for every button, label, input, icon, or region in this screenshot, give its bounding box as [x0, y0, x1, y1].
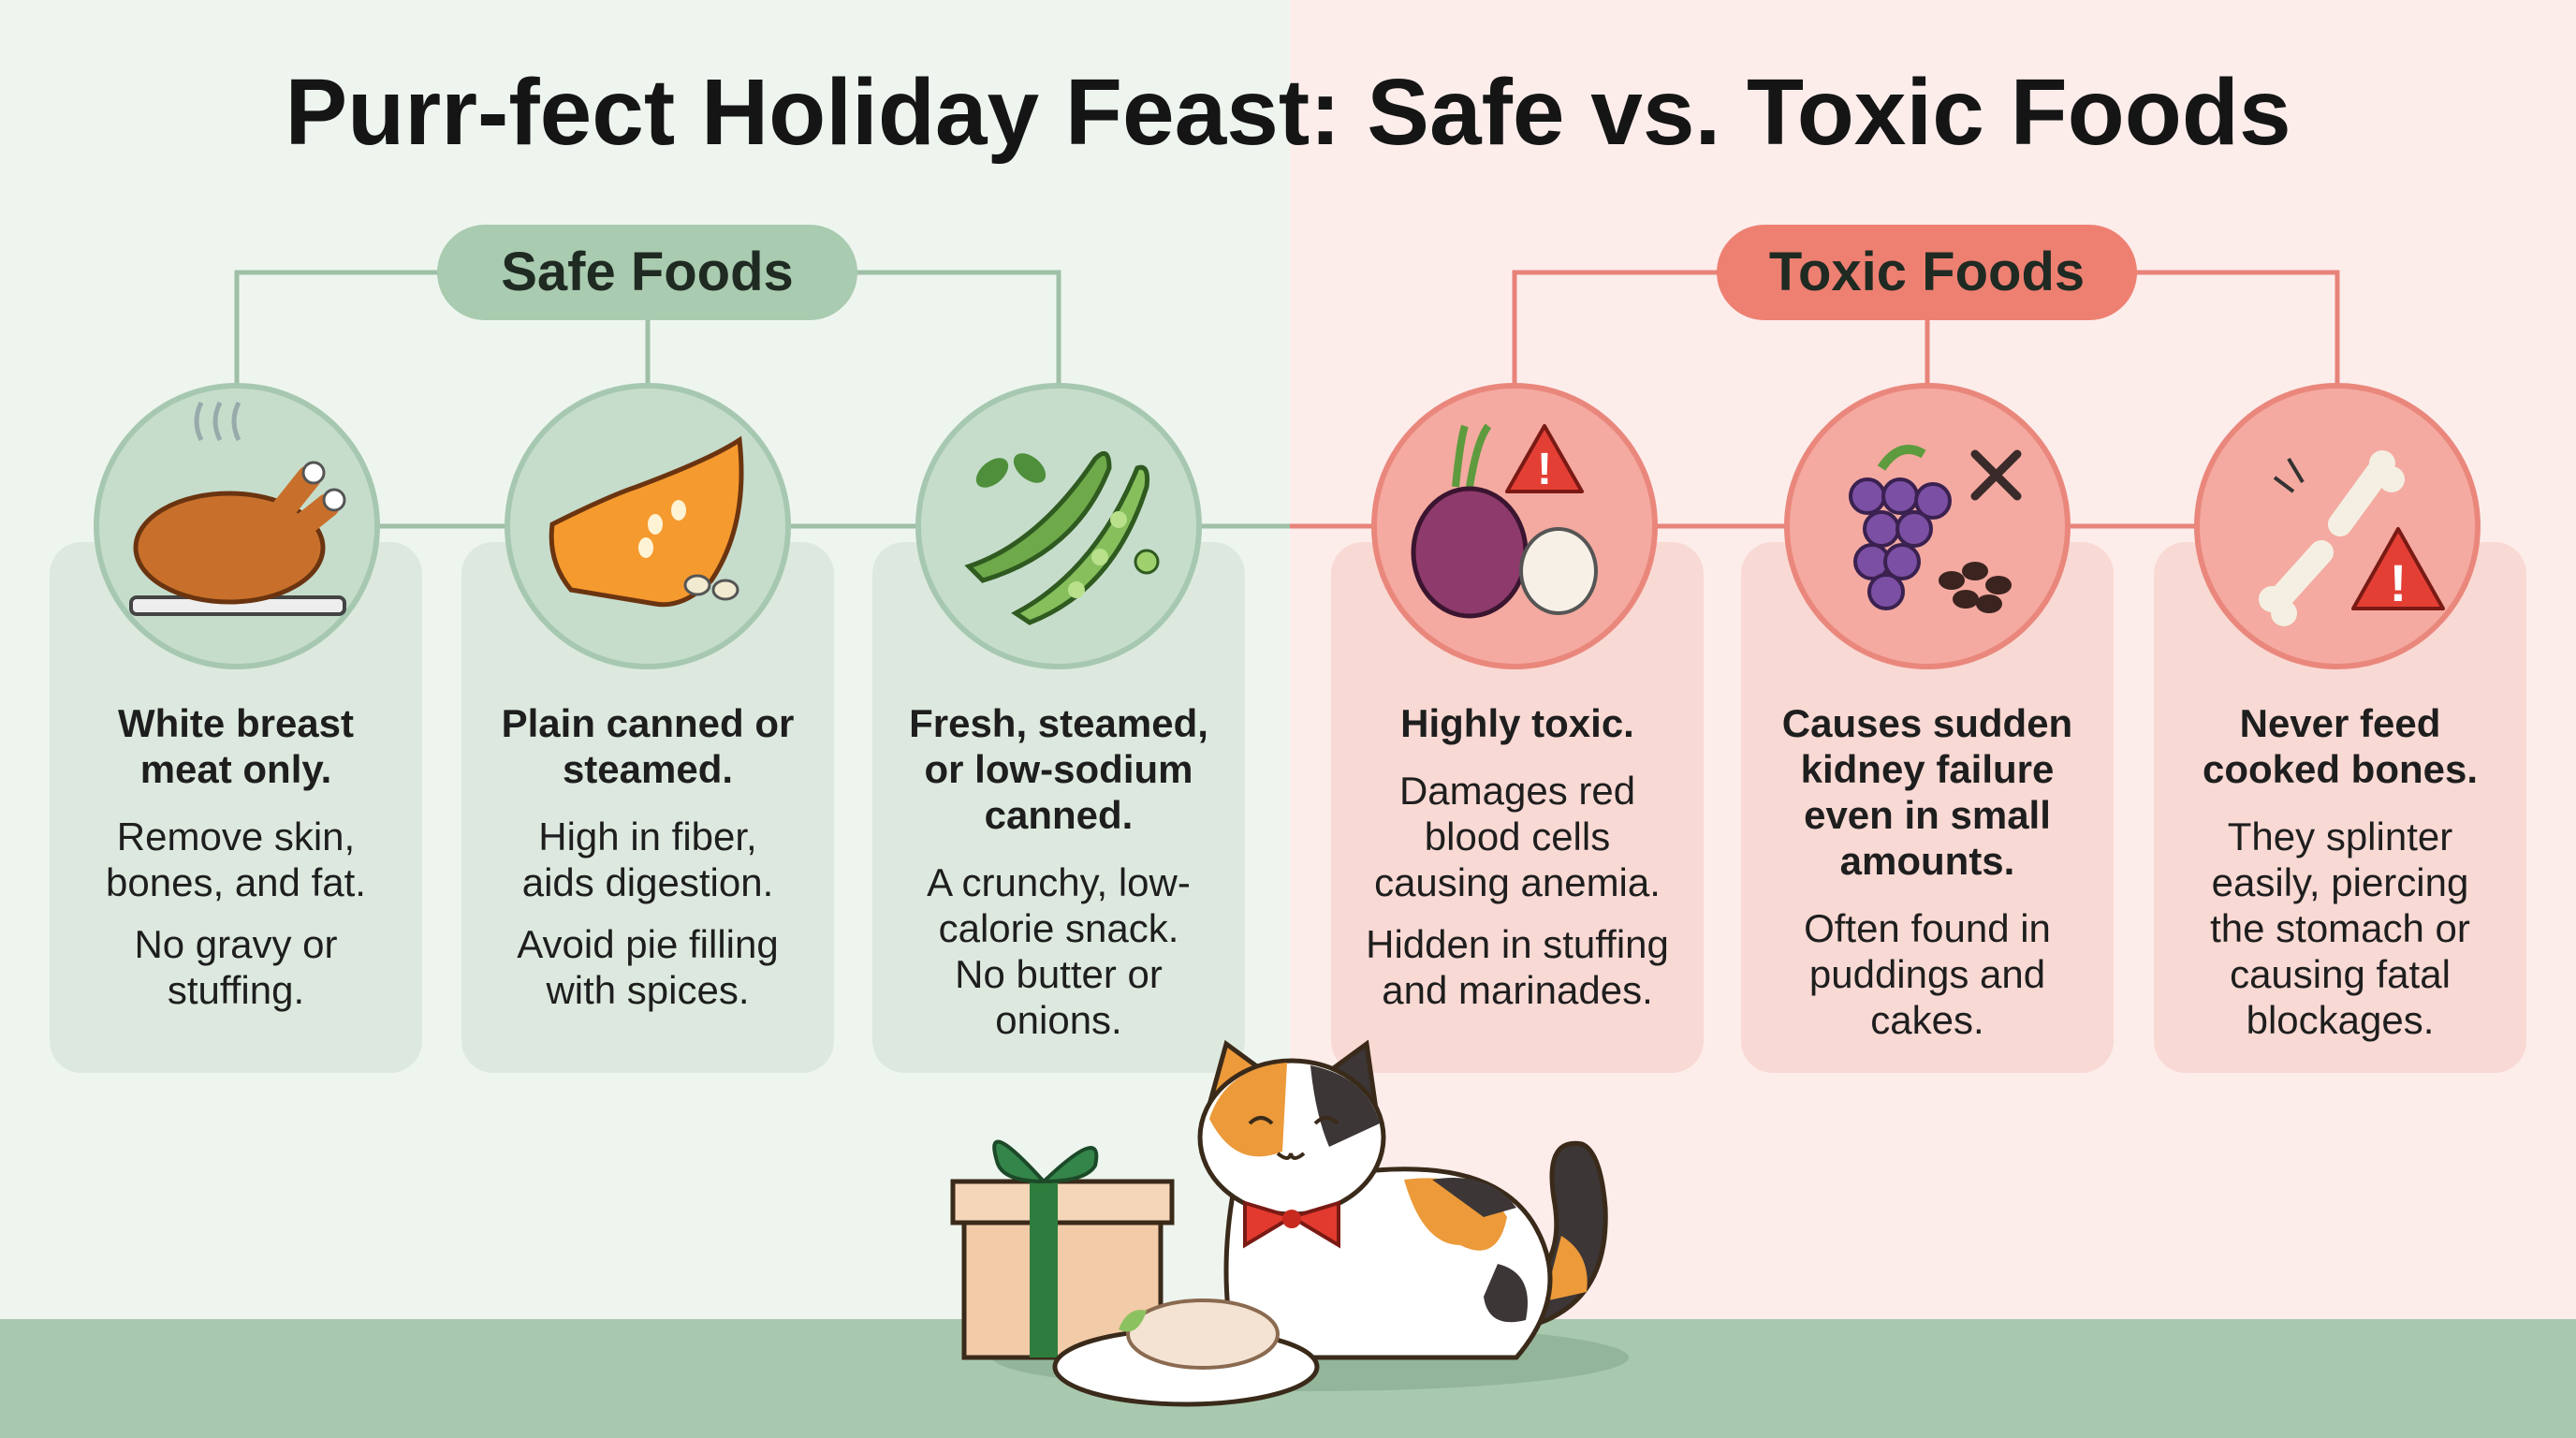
text: pumpkin — [502, 701, 794, 1012]
text: pumpkin: with spices. — [546, 968, 750, 1012]
body — [1226, 1169, 1550, 1357]
text: green peas: A crunchy, low- — [927, 860, 1191, 904]
pill: Safe Foods — [437, 225, 857, 320]
text: green peas — [909, 701, 1208, 1042]
text: green peas: No butter or — [955, 952, 1163, 996]
text: grapes: kidney failure — [1801, 747, 2054, 791]
text: bones: easily, piercing — [2212, 860, 2468, 904]
text: bones — [2203, 701, 2478, 1042]
icon circle: green peas — [918, 386, 1199, 667]
text: bones: Never feed — [2240, 701, 2440, 745]
text: turkey: Remove skin, — [117, 814, 355, 858]
card: safe 1 — [50, 542, 422, 1073]
icon circle: onion and garlic — [1374, 386, 1655, 667]
text: onion garlic: blood cells — [1425, 814, 1610, 858]
text: bones: causing fatal — [2230, 952, 2451, 996]
card: safe 3 — [872, 542, 1245, 1073]
icon circle: grapes and raisins — [1787, 386, 2068, 667]
icon circle: pumpkin — [507, 386, 788, 667]
text: bones: blockages. — [2247, 998, 2434, 1042]
text: pumpkin: aids digestion. — [522, 860, 773, 904]
text: green peas: onions. — [995, 998, 1122, 1042]
floor band — [0, 1319, 2576, 1438]
card: toxic 1 — [1331, 542, 1704, 1073]
gift box — [964, 1217, 1161, 1357]
text: green peas: calorie snack. — [939, 906, 1178, 950]
text: green peas: or low-sodium — [925, 747, 1193, 791]
icon circle: onion and garlic: ! — [1537, 445, 1552, 494]
text: turkey — [106, 701, 366, 1012]
tail — [1507, 1143, 1605, 1329]
icon circle: cooked bones: ! — [2390, 553, 2407, 612]
head — [1209, 1044, 1268, 1105]
icon circle: cooked bones — [2197, 386, 2478, 667]
text: turkey: meat only. — [140, 747, 331, 791]
pill: Toxic Foods: Toxic Foods — [1769, 242, 2085, 302]
text: turkey: stuffing. — [168, 968, 304, 1012]
pill: Toxic Foods — [1717, 225, 2137, 320]
text: bones: the stomach or — [2210, 906, 2470, 950]
text: turkey: No gravy or — [134, 922, 338, 966]
card: safe 2 — [461, 542, 834, 1073]
text: onion garlic: and marinades. — [1382, 968, 1653, 1012]
text: green peas: canned. — [985, 793, 1133, 837]
text: onion garlic — [1366, 701, 1669, 1012]
card: toxic 3 — [2154, 542, 2526, 1073]
bow — [1245, 1203, 1339, 1245]
connector lines safe — [237, 272, 1290, 526]
text: grapes: Causes sudden — [1782, 701, 2072, 745]
pill: Safe Foods: Safe Foods — [501, 242, 794, 302]
plate with chicken — [1055, 1329, 1317, 1404]
text: pumpkin: steamed. — [563, 747, 733, 791]
text: pumpkin: Avoid pie filling — [517, 922, 779, 966]
connector lines toxic — [1290, 272, 2337, 526]
text: onion garlic: Damages red — [1399, 769, 1635, 813]
text: grapes: even in small — [1804, 793, 2051, 837]
text: pumpkin: Plain canned or — [502, 701, 794, 745]
text: onion garlic: Hidden in stuffing — [1366, 922, 1669, 966]
text: bones: They splinter — [2228, 814, 2452, 858]
text: onion garlic: causing anemia. — [1374, 860, 1661, 904]
text: grapes: amounts. — [1840, 839, 2014, 883]
illustration: cat with gift and plate — [953, 1044, 1629, 1404]
title: Purr-fect Holiday Feast: Safe vs. Toxic Foods — [285, 60, 2291, 165]
text: grapes — [1782, 701, 2072, 1042]
text: grapes: Often found in — [1804, 906, 2051, 950]
icon circle: turkey — [96, 386, 377, 667]
text: turkey: White breast — [118, 701, 354, 745]
text: grapes: puddings and — [1809, 952, 2045, 996]
text: grapes: cakes. — [1870, 998, 1984, 1042]
background: pink right half — [1290, 0, 2576, 1438]
text: green peas: Fresh, steamed, — [909, 701, 1208, 745]
text: bones: cooked bones. — [2203, 747, 2478, 791]
text: turkey: bones, and fat. — [106, 860, 366, 904]
text: pumpkin: High in fiber, — [538, 814, 757, 858]
text: onion garlic: Highly toxic. — [1400, 701, 1634, 745]
card: toxic 2 — [1741, 542, 2114, 1073]
